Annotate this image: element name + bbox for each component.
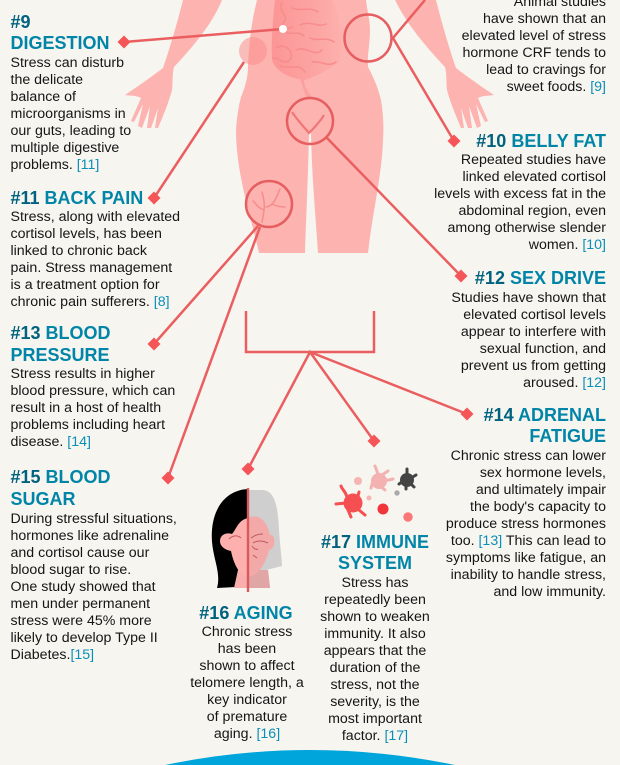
- text: #16 aging: Chronic stress: [202, 624, 292, 640]
- text: #15 blood sugar: During stressful situations,: [10, 511, 177, 527]
- text: #9 digestion: multiple digestive: [10, 140, 119, 156]
- text: #14 adrenal fatigue: symptoms like fatigue, an: [446, 550, 606, 566]
- text: #16 aging: telomere length, a: [190, 675, 304, 691]
- text: animal studies: elevated level of stress: [462, 28, 606, 44]
- text: #16 aging: key indicator: [207, 692, 287, 708]
- text: #10 belly fat: #10 BELLY FAT: [476, 131, 606, 151]
- callout circle: groin: [287, 98, 333, 144]
- text: #13 blood pressure: result in a host of health: [10, 400, 161, 416]
- text: #11 back pain: is a treatment option for: [10, 277, 160, 293]
- text: #17 immune system: severity, is the: [330, 694, 420, 710]
- text: #11 back pain: [10, 188, 180, 310]
- text: #17 immune system: SYSTEM: [338, 553, 412, 573]
- text: #15 blood sugar: hormones like adrenaline: [10, 528, 169, 544]
- text: #9 digestion: the delicate: [10, 72, 83, 88]
- text: #16 aging: #16 AGING: [199, 603, 293, 623]
- text: #9 digestion: Stress can disturb: [10, 55, 124, 71]
- text: #13 blood pressure: PRESSURE: [10, 345, 110, 365]
- intestines: [272, 0, 342, 97]
- text: #14 adrenal fatigue: and ultimately impair: [476, 482, 606, 498]
- text: #17 immune system: stress, not the: [330, 677, 420, 693]
- text: #15 blood sugar: stress were 45% more: [10, 613, 152, 629]
- text: #12 sex drive: elevated cortisol levels: [463, 307, 606, 323]
- left arm and hand: [125, 0, 222, 128]
- text: #14 adrenal fatigue: [446, 405, 606, 600]
- text: #15 blood sugar: #15 BLOOD: [10, 467, 111, 487]
- text: #14 adrenal fatigue: sex hormone levels,: [480, 465, 606, 481]
- text: #14 adrenal fatigue: and low immunity.: [494, 584, 606, 600]
- text: #17 immune system: shown to weaken: [320, 609, 430, 625]
- text: #15 blood sugar: [10, 467, 177, 663]
- text: #17 immune system: most important: [328, 711, 422, 727]
- torso and legs: [236, 0, 383, 253]
- right arm and hand: [395, 0, 494, 128]
- text: #14 adrenal fatigue: FATIGUE: [529, 426, 606, 446]
- illustration: human body: [125, 0, 494, 253]
- text: #9 digestion: #9: [10, 12, 31, 32]
- callout circle: back veins: [246, 181, 292, 227]
- text: #12 sex drive: Studies have shown that: [451, 290, 606, 306]
- text: #11 back pain: #11 BACK PAIN: [10, 188, 143, 208]
- text: #17 immune system: duration of the: [330, 660, 420, 676]
- text: #10 belly fat: linked elevated cortisol: [462, 169, 606, 185]
- text: #11 back pain: linked to chronic back: [10, 243, 148, 259]
- kidney marker: [239, 37, 267, 65]
- text: #10 belly fat: Repeated studies have: [461, 152, 606, 168]
- blue arc at bottom: [165, 750, 455, 765]
- text: animal studies: hormone CRF tends to: [462, 45, 606, 61]
- text: #16 aging: [190, 603, 304, 742]
- text: #15 blood sugar: and cortisol cause our: [10, 545, 150, 561]
- text: #12 sex drive: prevent us from getting: [461, 358, 606, 374]
- text: #10 belly fat: levels with excess fat in the: [434, 186, 606, 202]
- text: #11 back pain: Stress, along with elevated: [10, 209, 180, 225]
- text: #10 belly fat: women. [10]: [529, 237, 606, 253]
- callout circle: belly: [344, 14, 392, 62]
- text: #15 blood sugar: One study showed that: [10, 579, 156, 595]
- text: #14 adrenal fatigue: produce stress hormones: [446, 516, 606, 532]
- text: #12 sex drive: sexual function, and: [480, 341, 606, 357]
- text: #17 immune system: Stress has: [341, 575, 409, 591]
- text: #15 blood sugar: Diabetes.[15]: [10, 647, 94, 663]
- text: #9 digestion: [10, 12, 131, 173]
- text: #15 blood sugar: blood sugar to rise.: [10, 562, 131, 578]
- text: #12 sex drive: [451, 268, 606, 391]
- text: #13 blood pressure: disease. [14]: [10, 434, 91, 450]
- icon: aging face: [212, 488, 282, 592]
- text: #14 adrenal fatigue: #14 ADRENAL: [484, 405, 606, 425]
- text: #12 sex drive: appear to interfere with: [461, 324, 606, 340]
- text: #13 blood pressure: [10, 323, 175, 450]
- text: animal studies: lead to cravings for: [486, 62, 606, 78]
- text: #15 blood sugar: SUGAR: [10, 489, 76, 509]
- text: #16 aging: has been: [218, 641, 276, 657]
- text: #17 immune system: appears that the: [324, 643, 426, 659]
- text: #9 digestion: microorganisms in: [10, 106, 126, 122]
- text: #9 digestion: DIGESTION: [10, 33, 110, 53]
- text: #11 back pain: pain. Stress management: [10, 260, 172, 276]
- text: #16 aging: of premature: [207, 709, 287, 725]
- text: #10 belly fat: [434, 131, 606, 253]
- text: #13 blood pressure: Stress results in higher: [10, 366, 155, 382]
- text: #17 immune system: [320, 532, 430, 744]
- text: #14 adrenal fatigue: the body's capacity to: [470, 499, 606, 515]
- text: #11 back pain: chronic pain sufferers. [8]: [10, 294, 170, 310]
- text: #14 adrenal fatigue: Chronic stress can lower: [451, 448, 606, 464]
- text: #9 digestion: problems. [11]: [10, 157, 99, 173]
- text: #13 blood pressure: #13 BLOOD: [10, 323, 111, 343]
- text: #9 digestion: balance of: [10, 89, 76, 105]
- text: #17 immune system: #17 IMMUNE: [321, 532, 429, 552]
- text: #17 immune system: immunity. It also: [324, 626, 426, 642]
- text: #12 sex drive: aroused. [12]: [523, 375, 606, 391]
- text: #17 immune system: factor. [17]: [342, 728, 408, 744]
- text: #14 adrenal fatigue: inability to handle stress,: [451, 567, 606, 583]
- text: #13 blood pressure: blood pressure, which can: [10, 383, 175, 399]
- text: #16 aging: shown to affect: [199, 658, 295, 674]
- text: animal studies: have shown that an: [483, 11, 606, 27]
- text: #9 digestion: our guts, leading to: [10, 123, 131, 139]
- text: #12 sex drive: #12 SEX DRIVE: [475, 268, 606, 288]
- text: #11 back pain: cortisol levels, has been: [10, 226, 162, 242]
- icon: immune system germs: [336, 466, 416, 522]
- text: #13 blood pressure: problems including heart: [10, 417, 165, 433]
- text: animal studies: sweet foods. [9]: [507, 79, 606, 95]
- connector lines and markers: [117, 0, 474, 485]
- text: #14 adrenal fatigue: too. [13] This can lead to: [451, 533, 606, 549]
- text: #16 aging: aging. [16]: [214, 726, 280, 742]
- text: #15 blood sugar: men under permanent: [10, 596, 150, 612]
- text: #15 blood sugar: likely to develop Type II: [10, 630, 158, 646]
- text: #10 belly fat: among otherwise slender: [447, 220, 606, 236]
- text: #17 immune system: repeatedly been: [324, 592, 426, 608]
- text: #10 belly fat: abdominal region, even: [458, 203, 606, 219]
